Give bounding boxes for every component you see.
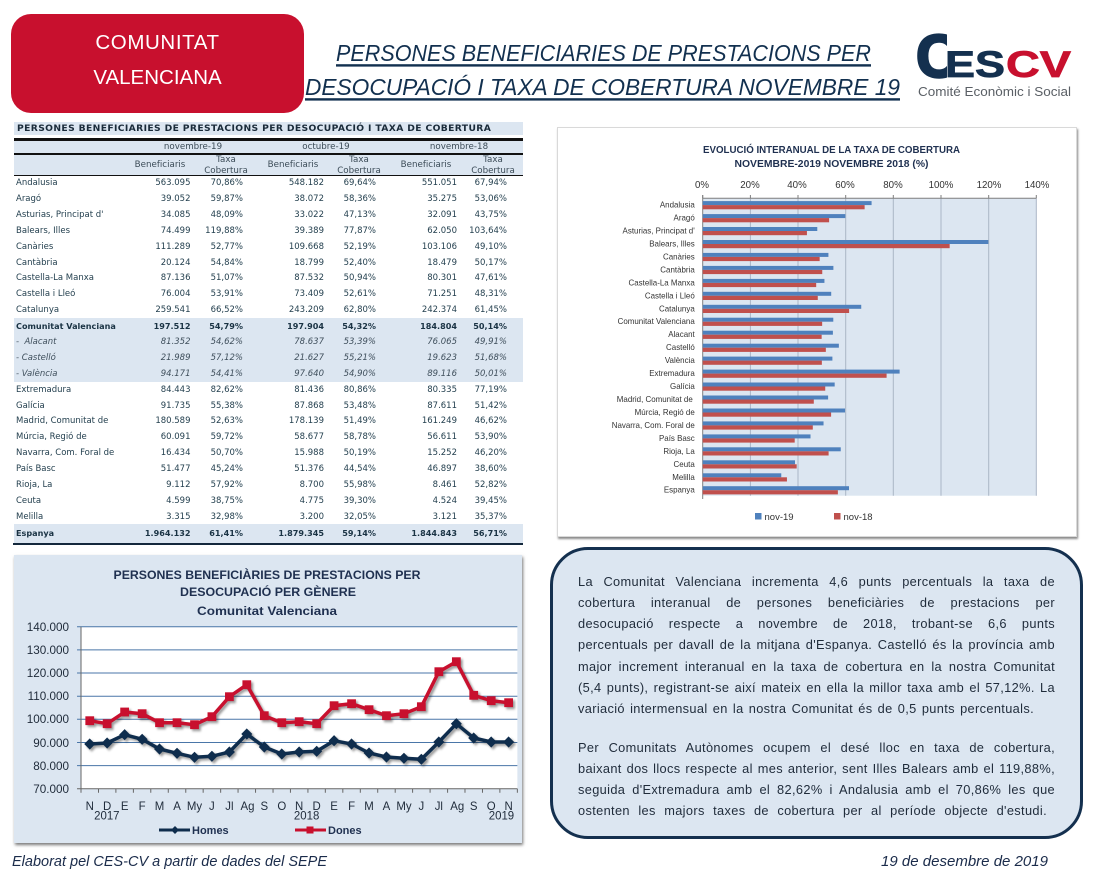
plot background and grid <box>703 195 1036 499</box>
table rows: Balears, Illes <box>16 226 70 236</box>
x axis month labels: S <box>260 801 268 813</box>
table rows: 55,38% <box>211 400 243 410</box>
line chart title: PERSONES BENEFICIÀRIES DE PRESTACIONS PER <box>114 569 421 582</box>
table rows: 33.022 <box>294 210 324 220</box>
data table <box>13 122 523 545</box>
x axis month labels: E <box>330 801 338 813</box>
table rows: 50,14% <box>473 321 507 331</box>
table rows: 103,64% <box>469 226 507 236</box>
table rows: 563.095 <box>155 178 190 188</box>
bars and region labels: Catalunya <box>659 304 695 313</box>
table rows: 57,92% <box>211 480 243 490</box>
x axis month labels: O <box>487 801 496 813</box>
table rows: 49,91% <box>475 337 507 347</box>
table rows: 109.668 <box>289 242 324 252</box>
bars and region labels: Cantàbria <box>660 265 695 274</box>
logo: CES-CV: ES <box>945 44 1005 85</box>
table rows: 53,91% <box>211 289 243 299</box>
x axis month labels: D <box>103 801 111 813</box>
x axis month labels: D <box>313 801 321 813</box>
paragraph 2: ostenten les majors taxes de cobertura per al període objecte d'estudi. <box>578 803 1047 818</box>
bar chart legend: nov-18 <box>844 512 873 523</box>
x axis month labels: N <box>504 801 513 813</box>
bars and region labels: Espanya <box>664 486 695 495</box>
y axis labels: 100.000 <box>27 713 69 726</box>
table rows: 34.085 <box>161 210 190 220</box>
table rows: Andalusia <box>16 178 58 188</box>
paragraph 1: variació intermensual en la nostra Comunitat és de 0,5 punts percentuals. <box>578 701 1034 716</box>
bar chart legend <box>755 512 873 523</box>
footer source and date <box>12 854 1048 870</box>
table rows: 53,06% <box>475 194 507 204</box>
table rows: 69,64% <box>344 178 376 188</box>
main title: DESOCUPACIÓ I TAXA DE COBERTURA NOVEMBRE 19 <box>305 74 900 100</box>
percentage axis labels: 20% <box>740 180 760 191</box>
table rows: Rioja, La <box>16 480 52 490</box>
table rows: 161.249 <box>422 416 457 426</box>
table rows: 91.735 <box>161 400 190 410</box>
table rows: 54,62% <box>211 337 243 347</box>
table rows: - València <box>16 369 57 379</box>
table rows: 4.524 <box>433 496 457 506</box>
bars and region labels: Andalusia <box>660 201 695 210</box>
x axis month labels <box>86 801 514 823</box>
table rows: 62.050 <box>427 226 457 236</box>
table rows <box>16 178 507 538</box>
paragraph 2: seguida d'Extremadura amb el 82,62% i Andalusia amb el 70,86% les que <box>578 782 1055 797</box>
bars and region labels <box>612 201 988 495</box>
table rows: 87.532 <box>294 273 324 283</box>
table rows: 87.611 <box>427 400 457 410</box>
percentage axis labels: 0% <box>695 180 709 191</box>
x axis month labels: F <box>139 801 146 813</box>
y axis labels: 120.000 <box>27 667 69 680</box>
line chart legend: Dones <box>328 825 362 837</box>
table rows: 15.252 <box>427 448 457 458</box>
column headers: novembre-19 <box>164 142 222 152</box>
table rows: 58,36% <box>344 194 376 204</box>
bar chart legend: nov-19 <box>764 512 794 523</box>
series: Homes <box>85 719 514 764</box>
paragraph 1: major increment interanual en la taxa de cobertura en la nostra Comunitat <box>578 659 1055 674</box>
bars and region labels: Alacant <box>668 330 696 339</box>
table rows: 54,32% <box>342 321 376 331</box>
y axis labels: 110.000 <box>28 690 69 703</box>
table rows: Canàries <box>16 242 53 252</box>
table rows: 53,48% <box>344 400 376 410</box>
table rows: Asturias, Principat d' <box>16 210 104 220</box>
table rows: País Basc <box>16 464 56 474</box>
table rows: 8.461 <box>433 480 457 490</box>
table rows: 77,87% <box>344 226 376 236</box>
x axis month labels: 2019 <box>489 810 514 823</box>
table rows: 50,70% <box>211 448 243 458</box>
column headers: Taxa <box>216 155 236 165</box>
logo: CES-CV: Comité Econòmic i Social <box>918 85 1071 99</box>
table rows: 59,87% <box>211 194 243 204</box>
table rows: 67,94% <box>475 178 507 188</box>
y axis labels: 80.000 <box>33 760 69 773</box>
table rows: 84.443 <box>161 385 190 395</box>
table rows: 1.964.132 <box>145 528 190 538</box>
paragraph 2: Per Comunitats Autònomes ocupem el desé lloc en taxa de cobertura, <box>578 740 1055 754</box>
table rows: 56.611 <box>427 432 457 442</box>
table rows: 48,09% <box>211 210 243 220</box>
table rows: 38.072 <box>294 194 324 204</box>
table rows: 58,78% <box>344 432 376 442</box>
table rows: 56,71% <box>473 528 507 538</box>
table rows: 16.434 <box>161 448 190 458</box>
line chart title: DESOCUPACIÓ PER GÈNERE <box>180 586 356 599</box>
table rows: 57,12% <box>211 353 243 363</box>
table rows: 50,19% <box>344 448 376 458</box>
table rows: 50,17% <box>475 258 507 268</box>
table rows: 39,45% <box>475 496 507 506</box>
table rows: 61,41% <box>209 528 243 538</box>
x axis month labels: N <box>86 801 94 813</box>
percentage axis labels <box>695 180 1050 191</box>
bars and region labels: Asturias, Principat d' <box>623 226 695 236</box>
series: Dones <box>86 658 513 729</box>
percentage axis labels: 40% <box>787 180 807 191</box>
table rows: 60.091 <box>161 432 190 442</box>
table rows: Melilla <box>16 512 43 522</box>
x axis month labels: My <box>396 801 412 813</box>
table rows: 3.121 <box>433 512 457 522</box>
table rows: 49,10% <box>475 242 507 252</box>
x axis month labels: S <box>470 801 478 813</box>
table rows: 197.904 <box>287 321 324 331</box>
column headers: Taxa <box>349 155 369 165</box>
table rows: 32,05% <box>344 512 376 522</box>
table rows: 89.116 <box>427 369 457 379</box>
table rows: 242.374 <box>422 305 457 315</box>
table rows: 18.799 <box>294 258 324 268</box>
table rows: 59,14% <box>342 528 376 538</box>
table rows: 81.352 <box>161 337 190 347</box>
table rows: Catalunya <box>16 305 59 315</box>
table rows: 3.315 <box>166 512 190 522</box>
percentage axis labels: 120% <box>977 180 1002 191</box>
x axis month labels: Jl <box>225 801 234 813</box>
table rows: 19.623 <box>427 353 457 363</box>
table rows: 76.065 <box>427 337 457 347</box>
bars and region labels: País Basc <box>659 434 695 443</box>
table rows: 1.844.843 <box>411 528 457 538</box>
panel: line chart by gender <box>14 555 522 843</box>
table rows: 32.091 <box>427 210 457 220</box>
table rows: 52,61% <box>344 289 376 299</box>
paragraph 1: percentuals per davall de la mitjana d'Espanya. Castelló és la província amb <box>578 637 1055 652</box>
table rows: 76.004 <box>161 289 190 299</box>
table rows: 45,24% <box>211 464 243 474</box>
header badge: Comunitat Valenciana <box>11 14 304 113</box>
table rows: Navarra, Com. Foral de <box>16 448 114 458</box>
table rows: 21.627 <box>294 353 324 363</box>
x axis month labels: F <box>348 801 355 813</box>
bars and region labels: Galícia <box>670 382 695 391</box>
main title: PERSONES BENEFICIARIES DE PRESTACIONS PER <box>336 40 871 66</box>
paragraph 2 <box>578 740 1055 818</box>
column headers <box>135 142 515 176</box>
table rows: 35,37% <box>475 512 507 522</box>
table rows: 80.301 <box>427 273 457 283</box>
table rows: 3.200 <box>300 512 324 522</box>
table rows: Ceuta <box>16 496 41 506</box>
table rows: Múrcia, Regió de <box>16 432 87 442</box>
bars and region labels: Melilla <box>672 473 695 482</box>
column headers: novembre-18 <box>430 142 488 152</box>
table rows: 70,86% <box>211 178 243 188</box>
table rows: 9.112 <box>166 480 190 490</box>
paragraph 1: La Comunitat Valenciana incrementa 4,6 punts percentuals la taxa de <box>578 574 1055 588</box>
x axis month labels: J <box>418 801 424 813</box>
table rows: Madrid, Comunitat de <box>16 416 108 426</box>
x axis month labels: E <box>121 801 129 813</box>
line chart title: Comunitat Valenciana <box>197 604 337 618</box>
x axis month labels: A <box>383 801 391 813</box>
table rows: 50,01% <box>475 369 507 379</box>
table rows: 77,19% <box>475 385 507 395</box>
line chart legend <box>159 825 362 837</box>
x axis month labels: Ag <box>450 801 464 813</box>
table rows: 51,07% <box>211 273 243 283</box>
table rows: 52,63% <box>211 416 243 426</box>
bars and region labels: Extremadura <box>649 369 695 378</box>
column headers: Cobertura <box>471 166 515 176</box>
y axis labels <box>27 621 69 796</box>
footer source and date: 19 de desembre de 2019 <box>881 854 1048 870</box>
table rows: 52,77% <box>211 242 243 252</box>
bars and region labels: Comunitat Valenciana <box>618 317 695 326</box>
table rows: 15.988 <box>294 448 324 458</box>
column headers: Beneficiaris <box>135 160 185 170</box>
table rows: 197.512 <box>154 321 190 331</box>
logo: CES-CV: C <box>916 25 959 90</box>
table rows: 8.700 <box>300 480 324 490</box>
bars and region labels: Aragó <box>674 214 695 223</box>
bars and region labels: Navarra, Com. Foral de <box>612 421 695 430</box>
table rows: 46.897 <box>427 464 457 474</box>
table rows: 87.136 <box>161 273 190 283</box>
table rows: Espanya <box>16 528 54 538</box>
table rows: 46,62% <box>475 416 507 426</box>
header badge: Comunitat Valenciana: VALENCIANA <box>93 66 222 89</box>
table rows: 39.052 <box>161 194 190 204</box>
bars and region labels: Castella i Lleó <box>645 291 695 300</box>
table rows: 51.376 <box>294 464 324 474</box>
x axis month labels: Jl <box>435 801 443 813</box>
table rows: 4.599 <box>166 496 190 506</box>
table rows: 58.677 <box>294 432 324 442</box>
table rows: 54,84% <box>211 258 243 268</box>
x axis month labels: M <box>364 801 374 813</box>
table rows: 74.499 <box>161 226 190 236</box>
table rows: 103.106 <box>422 242 457 252</box>
y axis labels: 130.000 <box>27 644 69 657</box>
x axis month labels: O <box>277 801 286 813</box>
paragraph 1: (5,4 punts), registrant-se així mateix en ella la millor taxa amb el 57,12%. La <box>578 680 1055 695</box>
table rows: 21.989 <box>161 353 190 363</box>
panel: commentary text <box>550 547 1083 839</box>
table rows: 94.171 <box>161 369 190 379</box>
table rows: 82,62% <box>211 385 243 395</box>
table rows: 53,39% <box>344 337 376 347</box>
bars and region labels: Castella-La Manxa <box>628 278 695 287</box>
table rows: 38,75% <box>211 496 243 506</box>
table rows: 78.637 <box>294 337 324 347</box>
table title: PERSONES BENEFICIARIES DE PRESTACIONS PER DESOCUPACIÓ I TAXA DE COBERTURA <box>17 123 491 134</box>
table rows: 243.209 <box>289 305 324 315</box>
column headers: Cobertura <box>337 166 381 176</box>
table rows: 52,82% <box>475 480 507 490</box>
line chart title <box>114 569 421 618</box>
column headers: Cobertura <box>204 166 248 176</box>
table rows: 551.051 <box>422 178 457 188</box>
paragraph 1: cobertura interanual de persones beneficiàries de prestacions per <box>578 595 1055 610</box>
table rows: 20.124 <box>161 258 190 268</box>
percentage axis labels: 80% <box>883 180 903 191</box>
percentage axis labels: 140% <box>1025 180 1050 191</box>
main title <box>305 40 900 101</box>
x axis month labels: Ag <box>241 801 254 813</box>
bars and region labels: València <box>665 356 695 365</box>
table rows: Extremadura <box>16 385 71 395</box>
table rows: 47,61% <box>475 273 507 283</box>
bars and region labels: Balears, Illes <box>649 239 695 249</box>
x axis month labels: A <box>173 801 181 813</box>
logo: CES-CV: CV <box>1006 44 1071 85</box>
table rows: 73.409 <box>294 289 324 299</box>
table rows: 54,90% <box>344 369 376 379</box>
line chart: beneficiaries by gender <box>27 568 518 837</box>
table rows: 55,21% <box>344 353 376 363</box>
table rows: 51.477 <box>161 464 190 474</box>
percentage axis labels: 60% <box>835 180 855 191</box>
table rows: Castella-La Manxa <box>16 273 94 283</box>
table rows: 61,45% <box>475 305 507 315</box>
table rows: 1.879.345 <box>278 528 324 538</box>
panel: bar chart of coverage rate <box>557 127 1077 537</box>
y axis labels: 140.000 <box>27 621 69 634</box>
x axis month labels: N <box>295 801 303 813</box>
x axis month labels: M <box>155 801 164 813</box>
table rows: 548.182 <box>289 178 324 188</box>
bars and region labels: Madrid, Comunitat de <box>617 395 693 404</box>
table rows: 18.479 <box>427 258 457 268</box>
table rows: 80,86% <box>344 385 376 395</box>
bars and region labels: Múrcia, Regió de <box>635 408 695 417</box>
table rows: 54,79% <box>209 321 243 331</box>
y axis labels: 70.000 <box>33 783 69 796</box>
table rows: Galícia <box>16 400 45 410</box>
logo: CES-CV <box>917 33 1072 99</box>
chart title <box>703 143 960 170</box>
bars and region labels: Ceuta <box>674 460 695 469</box>
table rows: 259.541 <box>155 305 190 315</box>
table rows: - Alacant <box>16 337 56 347</box>
chart title: NOVEMBRE-2019 NOVEMBRE 2018 (%) <box>734 159 928 170</box>
chart title: EVOLUCIÓ INTERANUAL DE LA TAXA DE COBERTURA <box>703 143 960 156</box>
table rows: 111.289 <box>155 242 190 252</box>
table rows: 32,98% <box>211 512 243 522</box>
plot area and gridlines <box>77 627 517 793</box>
table rows: 50,94% <box>344 273 376 283</box>
table rows: 54,41% <box>211 369 243 379</box>
table rows: 47,13% <box>344 210 376 220</box>
table rows: 51,49% <box>344 416 376 426</box>
header badge: Comunitat Valenciana: COMUNITAT <box>95 31 220 54</box>
paragraph 1 <box>578 574 1055 716</box>
table rows: 39.389 <box>294 226 324 236</box>
table rows: 4.775 <box>300 496 324 506</box>
bar chart: coverage rate by region <box>612 143 1050 523</box>
table rows: 55,98% <box>344 480 376 490</box>
paragraph 2: baixant dos llocs respecte al mes anterior, sent Illes Balears amb el 119,88%, <box>578 761 1055 776</box>
table rows: Cantàbria <box>16 258 58 268</box>
table rows: 46,20% <box>475 448 507 458</box>
table rows: Comunitat Valenciana <box>16 321 116 331</box>
table rows: 59,72% <box>211 432 243 442</box>
table rows: 44,54% <box>344 464 376 474</box>
table rows: 43,75% <box>475 210 507 220</box>
table rows: - Castelló <box>16 353 56 363</box>
x axis month labels: My <box>187 801 202 813</box>
table rows: 178.139 <box>289 416 324 426</box>
x axis month labels: 2017 <box>94 810 120 823</box>
table rows: 53,90% <box>475 432 507 442</box>
table rows: 52,19% <box>344 242 376 252</box>
table rows: Aragó <box>16 194 41 204</box>
paragraph 1: desocupació respecte a novembre de 2018, trobant-se 6,6 punts <box>578 616 1055 631</box>
x axis month labels: 2018 <box>294 810 319 823</box>
footer source and date: Elaborat pel CES-CV a partir de dades del SEPE <box>12 854 327 870</box>
column headers: Beneficiaris <box>268 160 318 170</box>
table rows: 35.275 <box>427 194 457 204</box>
table rows: 119,88% <box>205 226 243 236</box>
table rows: 71.251 <box>427 289 457 299</box>
bars and region labels: Castelló <box>666 343 695 352</box>
column headers: Beneficiaris <box>401 160 451 170</box>
table rows: 87.868 <box>294 400 324 410</box>
table rows: 80.335 <box>427 385 457 395</box>
table rows: 48,31% <box>475 289 507 299</box>
line chart legend: Homes <box>192 825 229 837</box>
percentage axis labels: 100% <box>929 180 954 191</box>
column headers: octubre-19 <box>302 142 350 152</box>
table rows: 39,30% <box>344 496 376 506</box>
column headers: Taxa <box>483 155 503 165</box>
y axis labels: 90.000 <box>33 737 69 750</box>
table rows: 66,52% <box>211 305 243 315</box>
table rows: 51,68% <box>475 353 507 363</box>
table rows: 52,40% <box>344 258 376 268</box>
table rows: 97.640 <box>294 369 324 379</box>
table rows: Castella i Lleó <box>16 289 75 299</box>
table rows: 38,60% <box>475 464 507 474</box>
x axis month labels: J <box>209 801 215 813</box>
table rows: 62,80% <box>344 305 376 315</box>
table rows: 180.589 <box>155 416 190 426</box>
bars and region labels: Rioja, La <box>663 447 695 456</box>
table rows: 51,42% <box>475 400 507 410</box>
table rows: 81.436 <box>294 385 324 395</box>
bars and region labels: Canàries <box>663 252 695 261</box>
table rows: 184.804 <box>420 321 457 331</box>
